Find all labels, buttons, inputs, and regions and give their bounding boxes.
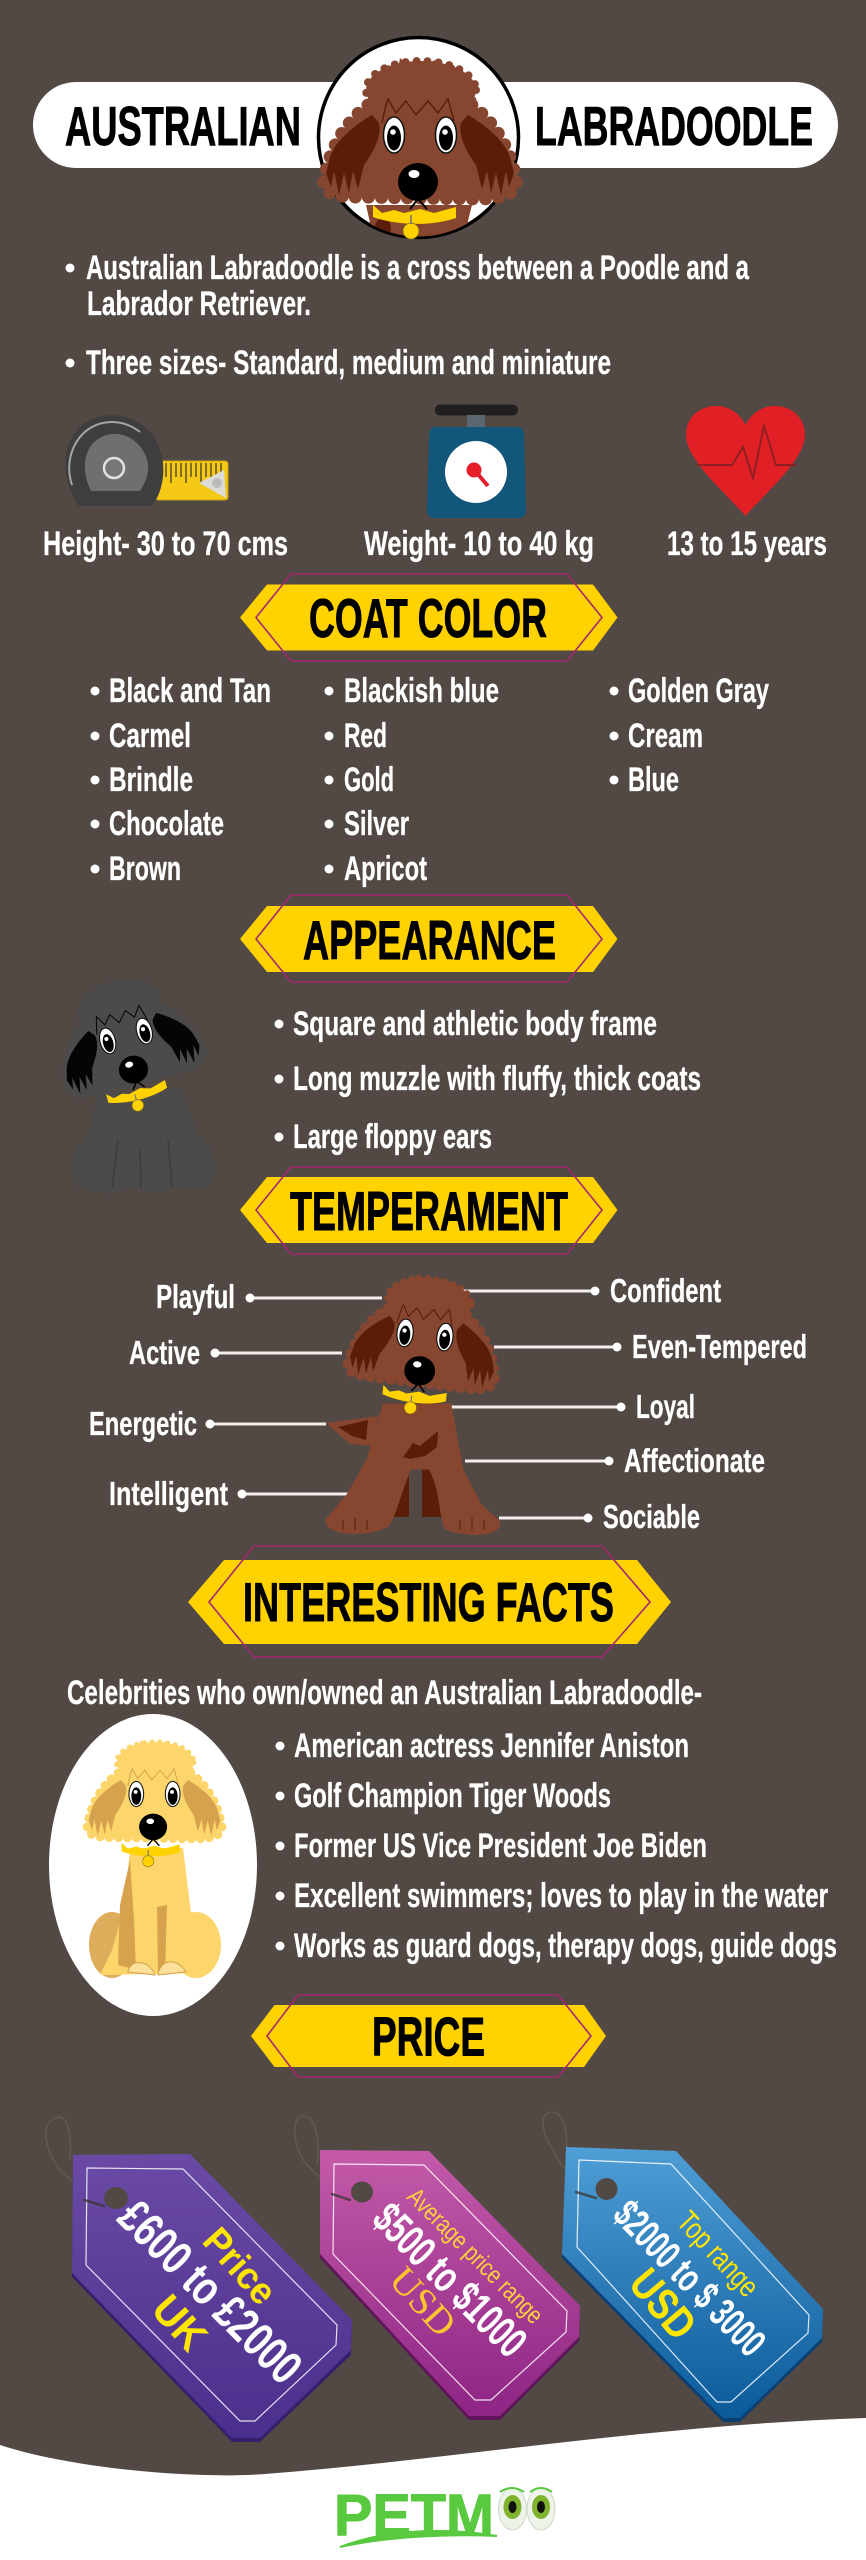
temperament labels: Loyal (636, 1388, 695, 1425)
heading: price (251, 1995, 606, 2077)
title text: Australian: AUSTRALIAN (65, 95, 301, 157)
facts bullets (276, 1727, 837, 1965)
intro bullets: Labrador Retriever. (87, 285, 311, 323)
stats labels: Height- 30 to 70 cms (43, 525, 288, 563)
heading: temperament: TEMPERAMENT (290, 1180, 568, 1242)
price tag: UK: £600 to £2000 (107, 2190, 312, 2395)
coat color list: column 2: Apricot (344, 850, 427, 888)
icon: weighing scale (427, 404, 526, 518)
coat color list: column 1 (90, 672, 271, 888)
temperament labels: Affectionate (624, 1442, 765, 1479)
temperament labels: Confident (610, 1272, 721, 1309)
golden dog in white oval (49, 1714, 257, 2016)
price tag: average: $500 to $1000 (363, 2194, 536, 2367)
white footer wave (0, 2418, 866, 2560)
temperament labels: Sociable (603, 1498, 700, 1535)
facts bullets: American actress Jennifer Aniston (294, 1727, 689, 1765)
icon: measuring tape (65, 415, 228, 506)
stats labels (43, 525, 827, 563)
heading: interesting facts: INTERESTING FACTS (243, 1571, 614, 1633)
price tag: UK (46, 2117, 352, 2442)
price tag: average: Average price range (401, 2182, 549, 2330)
temperament callout lines (206, 1286, 626, 1522)
heading: temperament (240, 1167, 618, 1254)
price tag: top range (543, 2112, 823, 2422)
temperament labels: Intelligent (109, 1475, 228, 1512)
appearance bullets: Square and athletic body frame (293, 1005, 657, 1043)
coat color list: column 1: Chocolate (109, 805, 224, 843)
temperament labels: Active (129, 1334, 200, 1371)
price tag: average: USD (381, 2259, 464, 2345)
temperament labels (89, 1272, 807, 1535)
heading: interesting facts (188, 1546, 671, 1657)
coat color list: column 3 (610, 672, 769, 799)
appearance bullets: Long muzzle with fluffy, thick coats (293, 1060, 701, 1098)
coat color list: column 1: Brindle (109, 761, 193, 799)
heading: price: PRICE (372, 2006, 485, 2068)
price tag: UK: Price (194, 2220, 284, 2313)
coat color list: column 2: Gold (344, 761, 394, 799)
temperament brown dog illustration (326, 1268, 505, 1533)
logo: Petmoo: PETM (334, 2483, 494, 2548)
coat color list: column 2: Red (344, 717, 387, 755)
price tag: top range: Top range (670, 2205, 765, 2304)
coat color list: column 1: Brown (109, 850, 181, 888)
title dog portrait (318, 38, 518, 245)
price tag: UK: UK (143, 2285, 217, 2360)
price tag: top range: USD (619, 2259, 706, 2349)
intro bullets (66, 249, 750, 382)
coat color list: column 2: Blackish blue (344, 672, 499, 710)
stats labels: Weight- 10 to 40 kg (364, 525, 594, 563)
appearance bullets (274, 1005, 701, 1156)
heading: appearance: APPEARANCE (303, 909, 556, 971)
title banner (33, 38, 838, 245)
heading: appearance (240, 895, 618, 982)
price tag: top range: $2000 to $ 3000 (605, 2192, 774, 2365)
coat color list: column 2: Silver (344, 805, 409, 843)
coat color list: column 1: Black and Tan (109, 672, 271, 710)
coat color list: column 1: Carmel (109, 717, 191, 755)
heading: coat color: COAT COLOR (309, 587, 547, 649)
appearance bullets: Large floppy ears (293, 1118, 492, 1156)
grey dog illustration (44, 964, 214, 1191)
coat color list: column 3: Blue (628, 761, 679, 799)
intro bullets: Three sizes- Standard, medium and miniature (86, 344, 611, 382)
price tag: average (295, 2116, 580, 2420)
coat color list: column 3: Cream (628, 717, 703, 755)
icon: heart with pulse (686, 406, 805, 516)
coat color list: column 3: Golden Gray (628, 672, 769, 710)
temperament labels: Playful (156, 1278, 235, 1315)
facts bullets: Former US Vice President Joe Biden (294, 1827, 707, 1865)
coat color list: column 2 (324, 672, 499, 888)
heading: coat color (240, 574, 618, 661)
temperament labels: Energetic (89, 1405, 197, 1442)
facts bullets: Golf Champion Tiger Woods (294, 1777, 611, 1815)
